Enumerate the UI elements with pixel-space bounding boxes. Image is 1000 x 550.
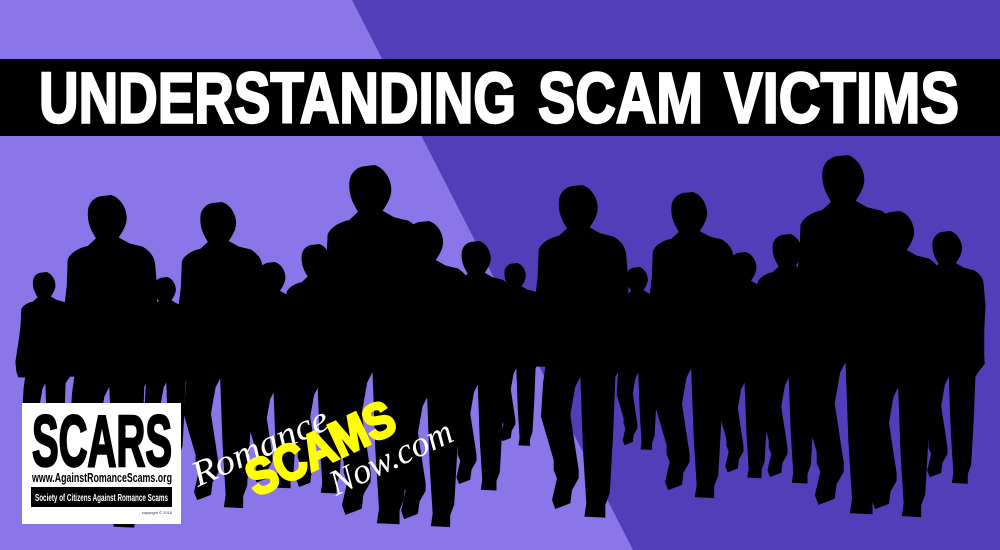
SCARS logo: Society of Citizens Against Romance Scams: [35, 493, 168, 504]
title banner: SCAM: [538, 60, 703, 138]
title banner: [0, 59, 1000, 138]
RomanceScamsNow logo: SCAMS: [237, 389, 404, 507]
background: dark purple diagonal panel: [352, 0, 1000, 550]
RomanceScamsNow logo: Romance: [184, 398, 335, 495]
crowd silhouette: [15, 155, 986, 528]
SCARS logo: [22, 402, 181, 524]
SCARS logo: copyright © 2016: [142, 510, 173, 515]
SCARS logo: SCARS: [32, 402, 172, 482]
RomanceScamsNow logo: Now.com: [322, 411, 459, 504]
title banner: UNDERSTANDING: [39, 60, 516, 138]
SCARS logo: www.AgainstRomanceScams.org: [31, 471, 172, 485]
RomanceScamsNow logo: [184, 389, 459, 507]
